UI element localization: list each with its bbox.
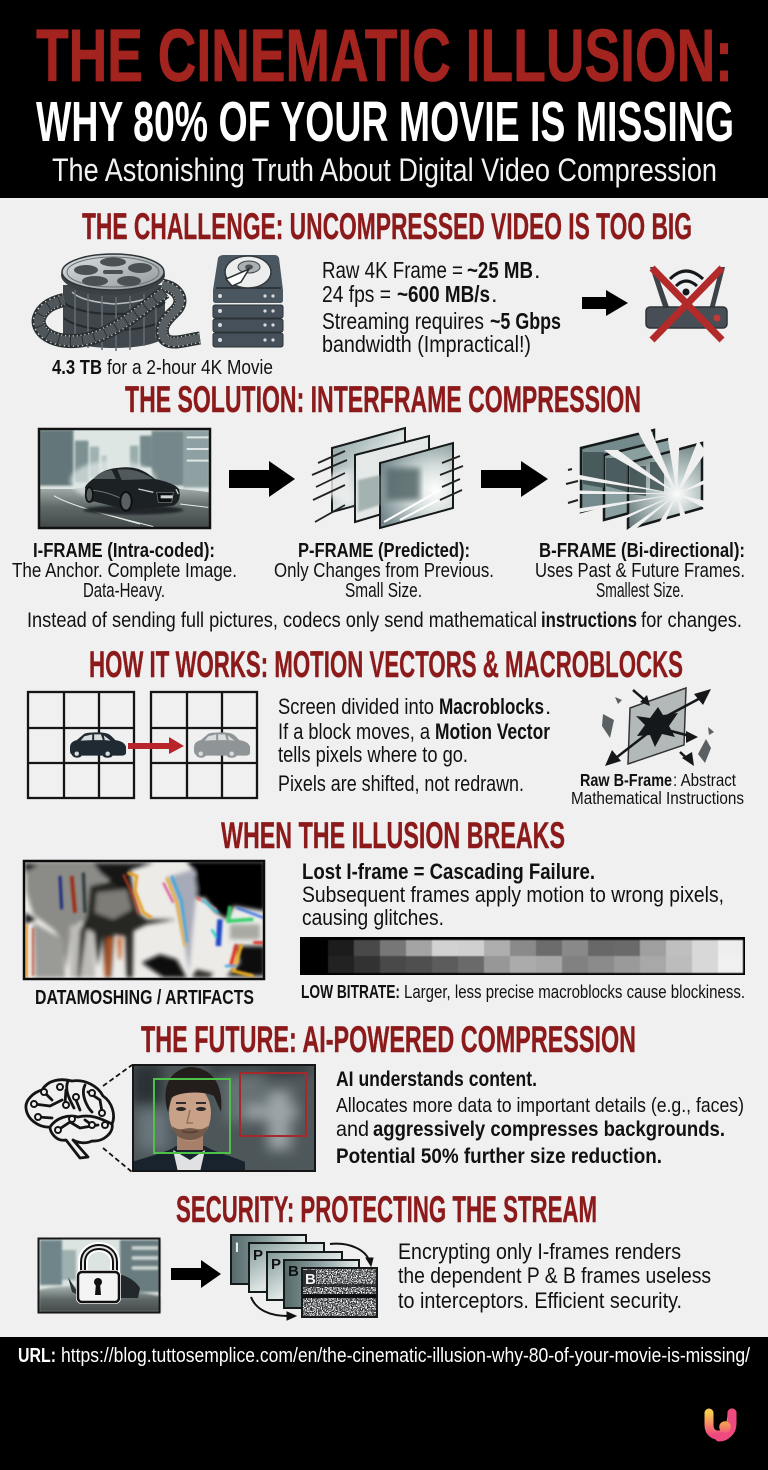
caption: raw B-frame: : Abstract <box>673 770 736 790</box>
arrow: motion vector <box>128 737 184 754</box>
text: instructions summary: Instead of sending full pictures, codecs only send mathematical <box>27 608 537 632</box>
icon: encrypted frame stack: P <box>253 1247 263 1264</box>
macroblock grid: before <box>28 692 134 798</box>
text block: data rates: 24 fps = <box>322 281 391 307</box>
caption: movie size <box>52 356 273 379</box>
arrow: to router <box>582 290 628 316</box>
dashed zoom lines <box>103 1065 132 1172</box>
text block: macroblocks: . <box>545 694 551 719</box>
icon: encrypted frame stack: P <box>271 1256 281 1273</box>
caption: raw B-frame <box>571 770 744 808</box>
label: B-frame <box>535 539 745 602</box>
caption: movie size: for a 2-hour 4K Movie <box>107 356 273 379</box>
header banner <box>0 0 768 198</box>
text block: macroblocks: If a block moves, a <box>278 719 430 744</box>
icon: B-frame shattered stack <box>566 426 712 534</box>
text: instructions summary: instructions <box>541 608 637 632</box>
icon: P-frame stack <box>310 428 463 528</box>
image: AI face detection <box>132 1064 316 1172</box>
label: I-frame: The Anchor. Complete Image. <box>12 559 237 582</box>
text block: data rates: ~600 MB/s <box>397 281 490 307</box>
text block: encryption: Encrypting only I-frames renders <box>398 1239 681 1264</box>
text block: macroblocks: Pixels are shifted, not redrawn. <box>278 771 524 796</box>
text block: data rates: Raw 4K Frame = <box>322 257 463 283</box>
arrow: I to P <box>229 461 295 497</box>
label: I-frame: Data-Heavy. <box>83 579 165 602</box>
text block: data rates: Streaming requires <box>322 308 484 334</box>
text block: AI compression <box>336 1067 744 1168</box>
label: P-frame: P-FRAME (Predicted): <box>298 539 470 562</box>
label: I-frame <box>12 539 237 602</box>
text block: macroblocks: tells pixels where to go. <box>278 742 468 767</box>
heading: when the illusion breaks: WHEN THE ILLUSION BREAKS <box>221 815 565 856</box>
text block: data rates: . <box>534 257 541 283</box>
labels: frame types <box>12 539 745 602</box>
text block: data rates: bandwidth (Impractical!) <box>322 331 531 357</box>
text block: AI compression: and <box>336 1118 369 1141</box>
caption: low bitrate: LOW BITRATE: <box>301 982 400 1002</box>
image: datamoshing glitch <box>24 861 265 979</box>
icon: raw B-frame burst <box>602 688 714 766</box>
text block: macroblocks: Screen divided into <box>278 694 434 719</box>
label: P-frame: Small Size. <box>345 579 422 602</box>
icon: encrypted frame stack: B <box>305 1271 316 1288</box>
icon: circuit brain <box>26 1080 114 1158</box>
car: source <box>70 732 126 758</box>
text block: AI compression: AI understands content. <box>336 1067 537 1091</box>
icon: router crossed out <box>646 267 727 340</box>
text block: data rates: ~25 MB <box>467 257 533 283</box>
text block: cascading failure: Lost I-frame = Cascading Failure. <box>302 859 595 884</box>
label: B-frame: Smallest Size. <box>596 579 684 602</box>
film strip right <box>162 285 200 342</box>
car: moved <box>194 732 250 758</box>
image: locked I-frame <box>38 1238 160 1313</box>
text block: data rates <box>322 257 561 357</box>
label: P-frame <box>274 539 494 602</box>
text block: cascading failure <box>302 859 724 930</box>
text block: encryption <box>398 1239 711 1313</box>
label: I-frame: I-FRAME (Intra-coded): <box>33 539 215 562</box>
icon: encrypted frame stack <box>231 1235 377 1320</box>
chart: low bitrate pixel bar <box>300 937 745 975</box>
icon: film reel <box>39 254 200 351</box>
text block: data rates: . <box>491 281 498 307</box>
text block: cascading failure: causing glitches. <box>302 905 444 930</box>
caption: raw B-frame: Raw B-Frame <box>580 770 672 790</box>
text block: macroblocks <box>278 694 551 796</box>
footer bar <box>0 1337 768 1470</box>
icon: encrypted frame stack: I <box>235 1239 239 1255</box>
text block: macroblocks: Macroblocks <box>439 694 544 719</box>
caption: raw B-frame: Mathematical Instructions <box>571 788 744 808</box>
caption: datamoshing: DATAMOSHING / ARTIFACTS <box>35 986 254 1009</box>
icon: encrypted frame stack: B <box>288 1263 299 1280</box>
logo <box>709 1413 732 1437</box>
arrow: to frame stack <box>171 1260 221 1288</box>
arrow: P to B <box>481 461 548 497</box>
text block: macroblocks: Motion Vector <box>435 719 550 744</box>
diagram: macroblock grids with motion vector <box>28 692 257 798</box>
label: P-frame: Only Changes from Previous. <box>274 559 494 582</box>
footer URL: URL: <box>18 1345 56 1367</box>
text block: encryption: the dependent P & B frames useless <box>398 1263 711 1288</box>
film strip left <box>39 292 165 341</box>
text block: encryption: to interceptors. Efficient security. <box>398 1288 682 1313</box>
text block: data rates: ~5 Gbps <box>490 308 561 334</box>
macroblock grid: after <box>151 692 257 798</box>
text block: AI compression: Potential 50% further size reduction. <box>336 1144 662 1168</box>
text: instructions summary: for changes. <box>641 608 742 632</box>
icon: hard drive stack <box>213 255 283 347</box>
text block: AI compression: aggressively compresses backgrounds. <box>373 1118 725 1141</box>
image: I-frame car on street <box>38 429 210 528</box>
caption: movie size: 4.3 TB <box>52 356 102 379</box>
